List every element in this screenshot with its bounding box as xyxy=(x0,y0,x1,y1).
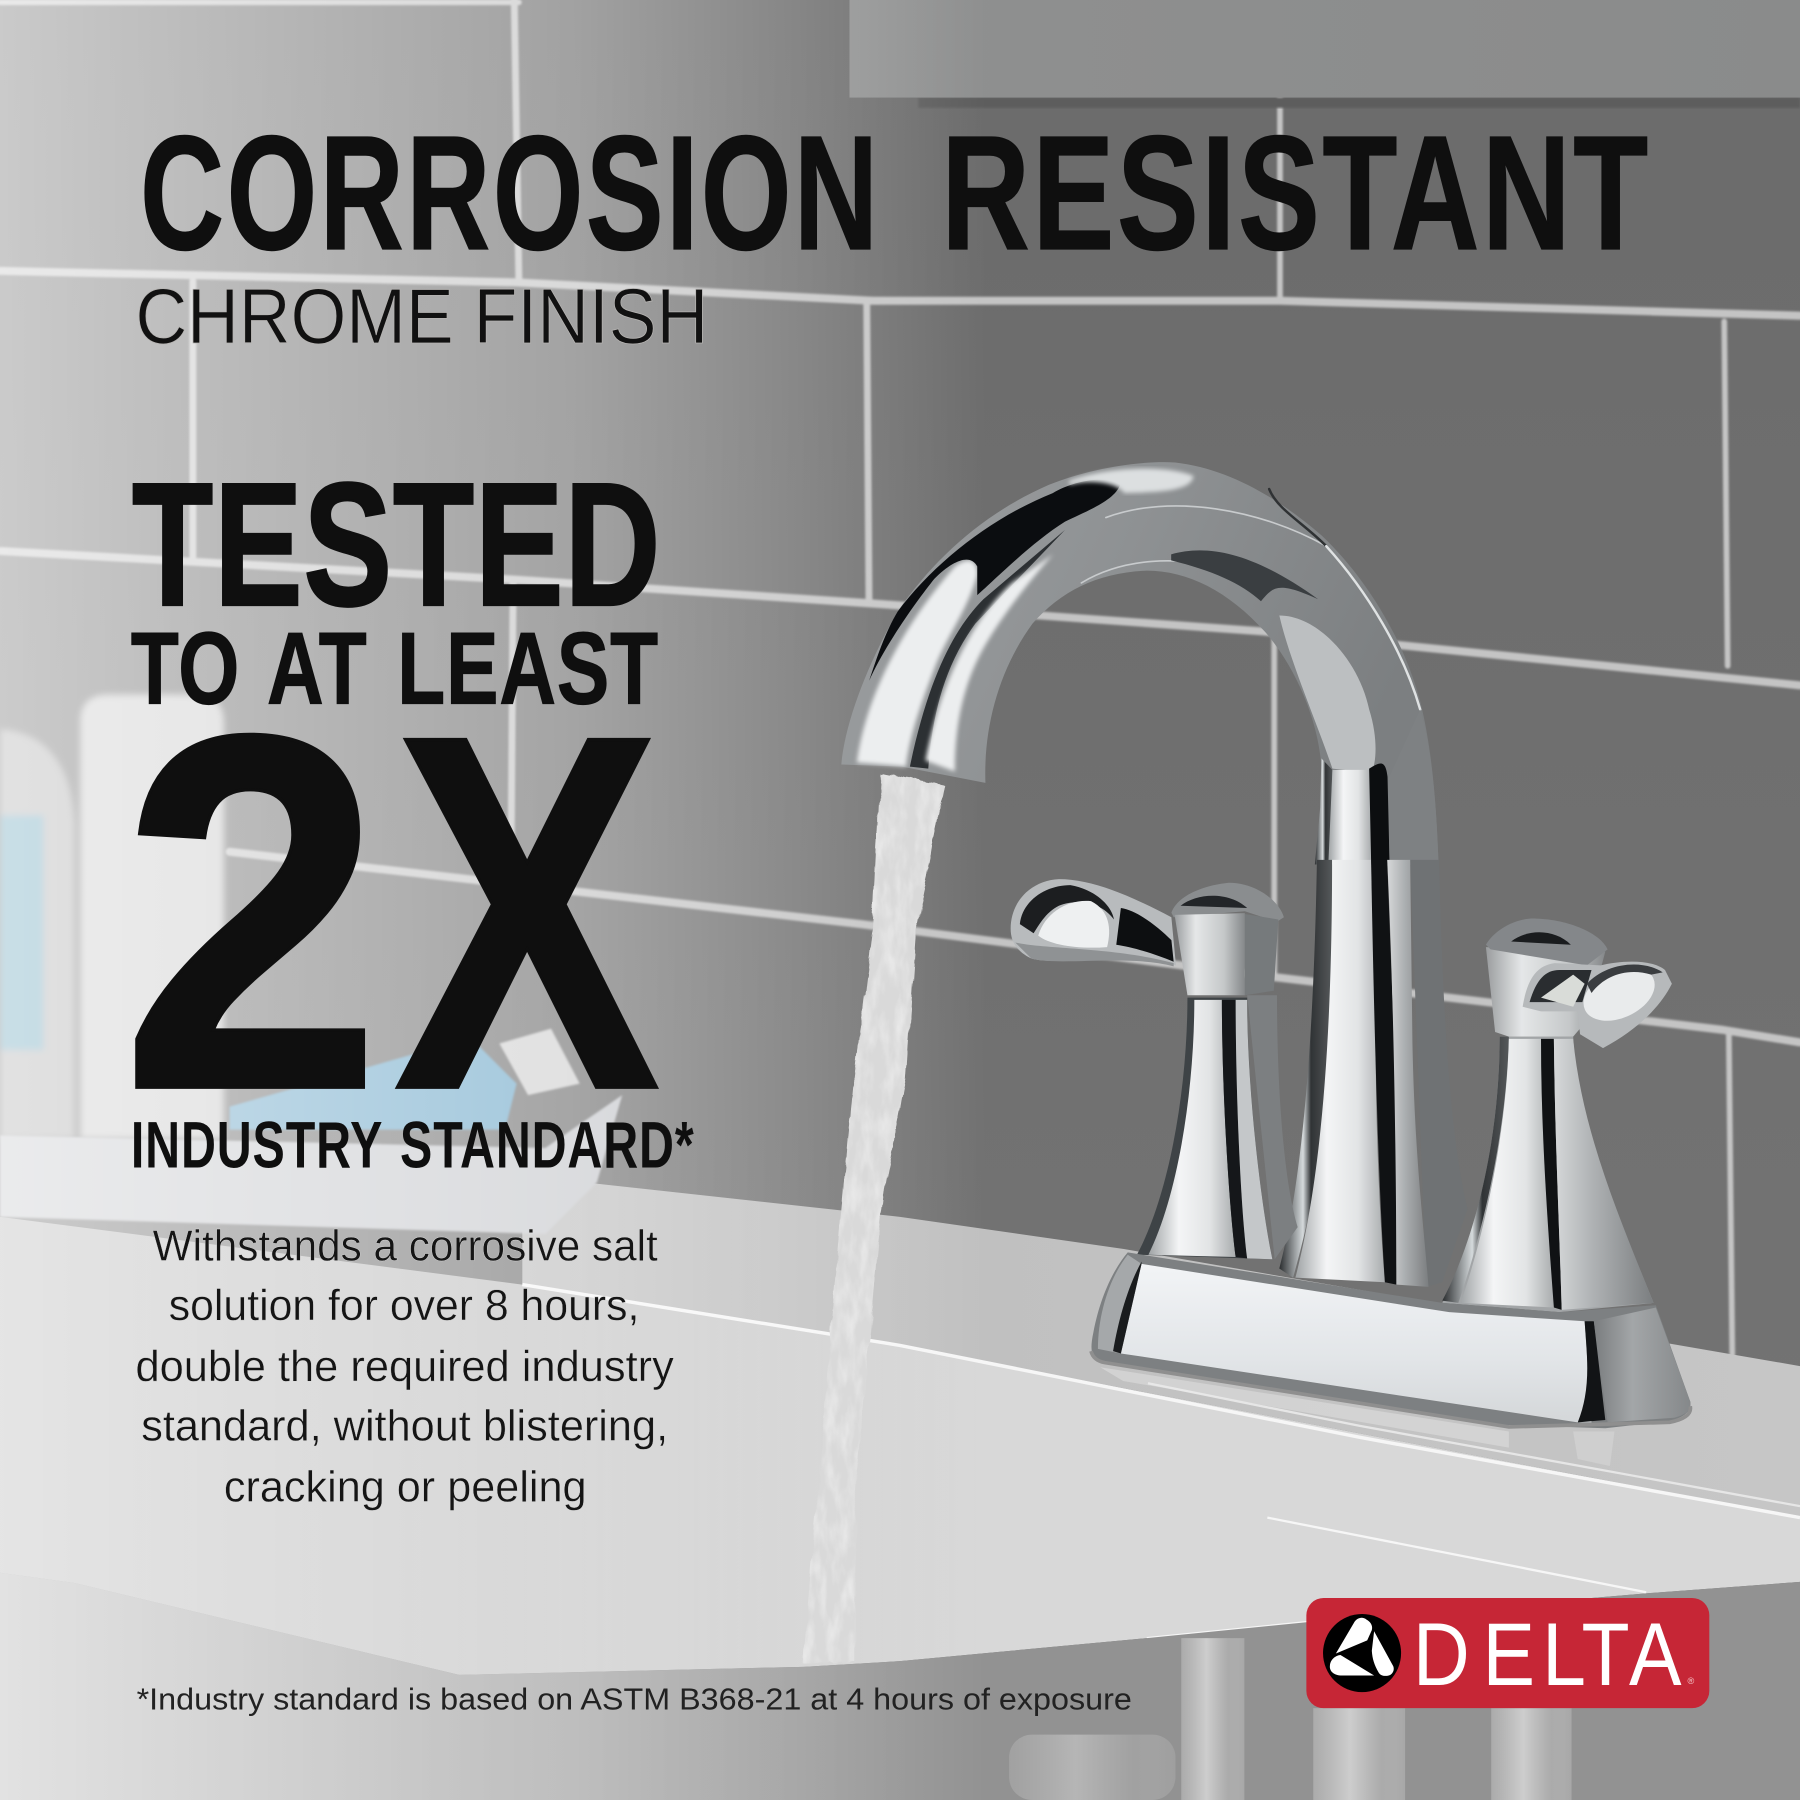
nozzle highlight xyxy=(857,561,977,767)
description text xyxy=(135,1222,674,1512)
logo wordmark: DELTA xyxy=(1413,1605,1682,1704)
description text: solution for over 8 hours, xyxy=(169,1282,639,1330)
logo mark xyxy=(1323,1614,1401,1692)
claim: tested to at least 2X industry standard xyxy=(121,447,695,1195)
Delta logo xyxy=(1306,1598,1709,1708)
right handle xyxy=(1442,918,1672,1312)
mirror edge xyxy=(849,0,1800,108)
tray xyxy=(0,1095,622,1234)
deck plate xyxy=(1091,1252,1691,1466)
second highlight xyxy=(925,554,1053,771)
underside highlight xyxy=(1279,616,1376,773)
tile grout lines xyxy=(0,0,1800,1355)
description text: standard, without blistering, xyxy=(141,1403,668,1451)
left white fade overlay xyxy=(0,0,987,1800)
chrome reflections on lower surface xyxy=(1009,1638,1572,1800)
basin front edge highlights xyxy=(522,1285,1800,1638)
lower stem xyxy=(1011,860,1691,1466)
basin xyxy=(0,1217,1800,1675)
dark inner strip xyxy=(910,530,1065,769)
title xyxy=(140,101,1651,284)
faucet xyxy=(841,462,1691,1466)
inner rim reflection xyxy=(1171,550,1318,601)
footnote: *Industry standard is based on ASTM B368-21 at 4 hours of exposure xyxy=(137,1681,1132,1716)
rim curves xyxy=(1081,489,1420,709)
description text: cracking or peeling xyxy=(224,1464,587,1512)
top highlight xyxy=(1069,469,1194,493)
letter X: X xyxy=(394,631,662,1195)
tested: TESTED xyxy=(132,447,661,643)
stem xyxy=(1315,758,1332,865)
description text: double the required industry xyxy=(135,1343,674,1391)
industry standard: INDUSTRY STANDARD* xyxy=(131,1108,695,1181)
description text: Withstands a corrosive salt xyxy=(153,1222,658,1270)
bottles xyxy=(0,695,224,1139)
toothpaste tube xyxy=(230,1029,580,1130)
to at least: TO AT LEAST xyxy=(131,612,659,726)
left handle xyxy=(1011,879,1298,1259)
numeral 2: 2 xyxy=(121,631,382,1195)
registered mark: ® xyxy=(1688,1676,1695,1686)
title: CORROSION xyxy=(140,101,880,284)
vanity counter behind the basin xyxy=(522,1176,1800,1518)
spout xyxy=(841,462,1439,865)
lower reflective surface xyxy=(0,1573,1800,1800)
water stream xyxy=(804,773,945,1663)
subtitle: CHROME FINISH xyxy=(135,272,708,360)
black reflection xyxy=(869,480,1120,681)
